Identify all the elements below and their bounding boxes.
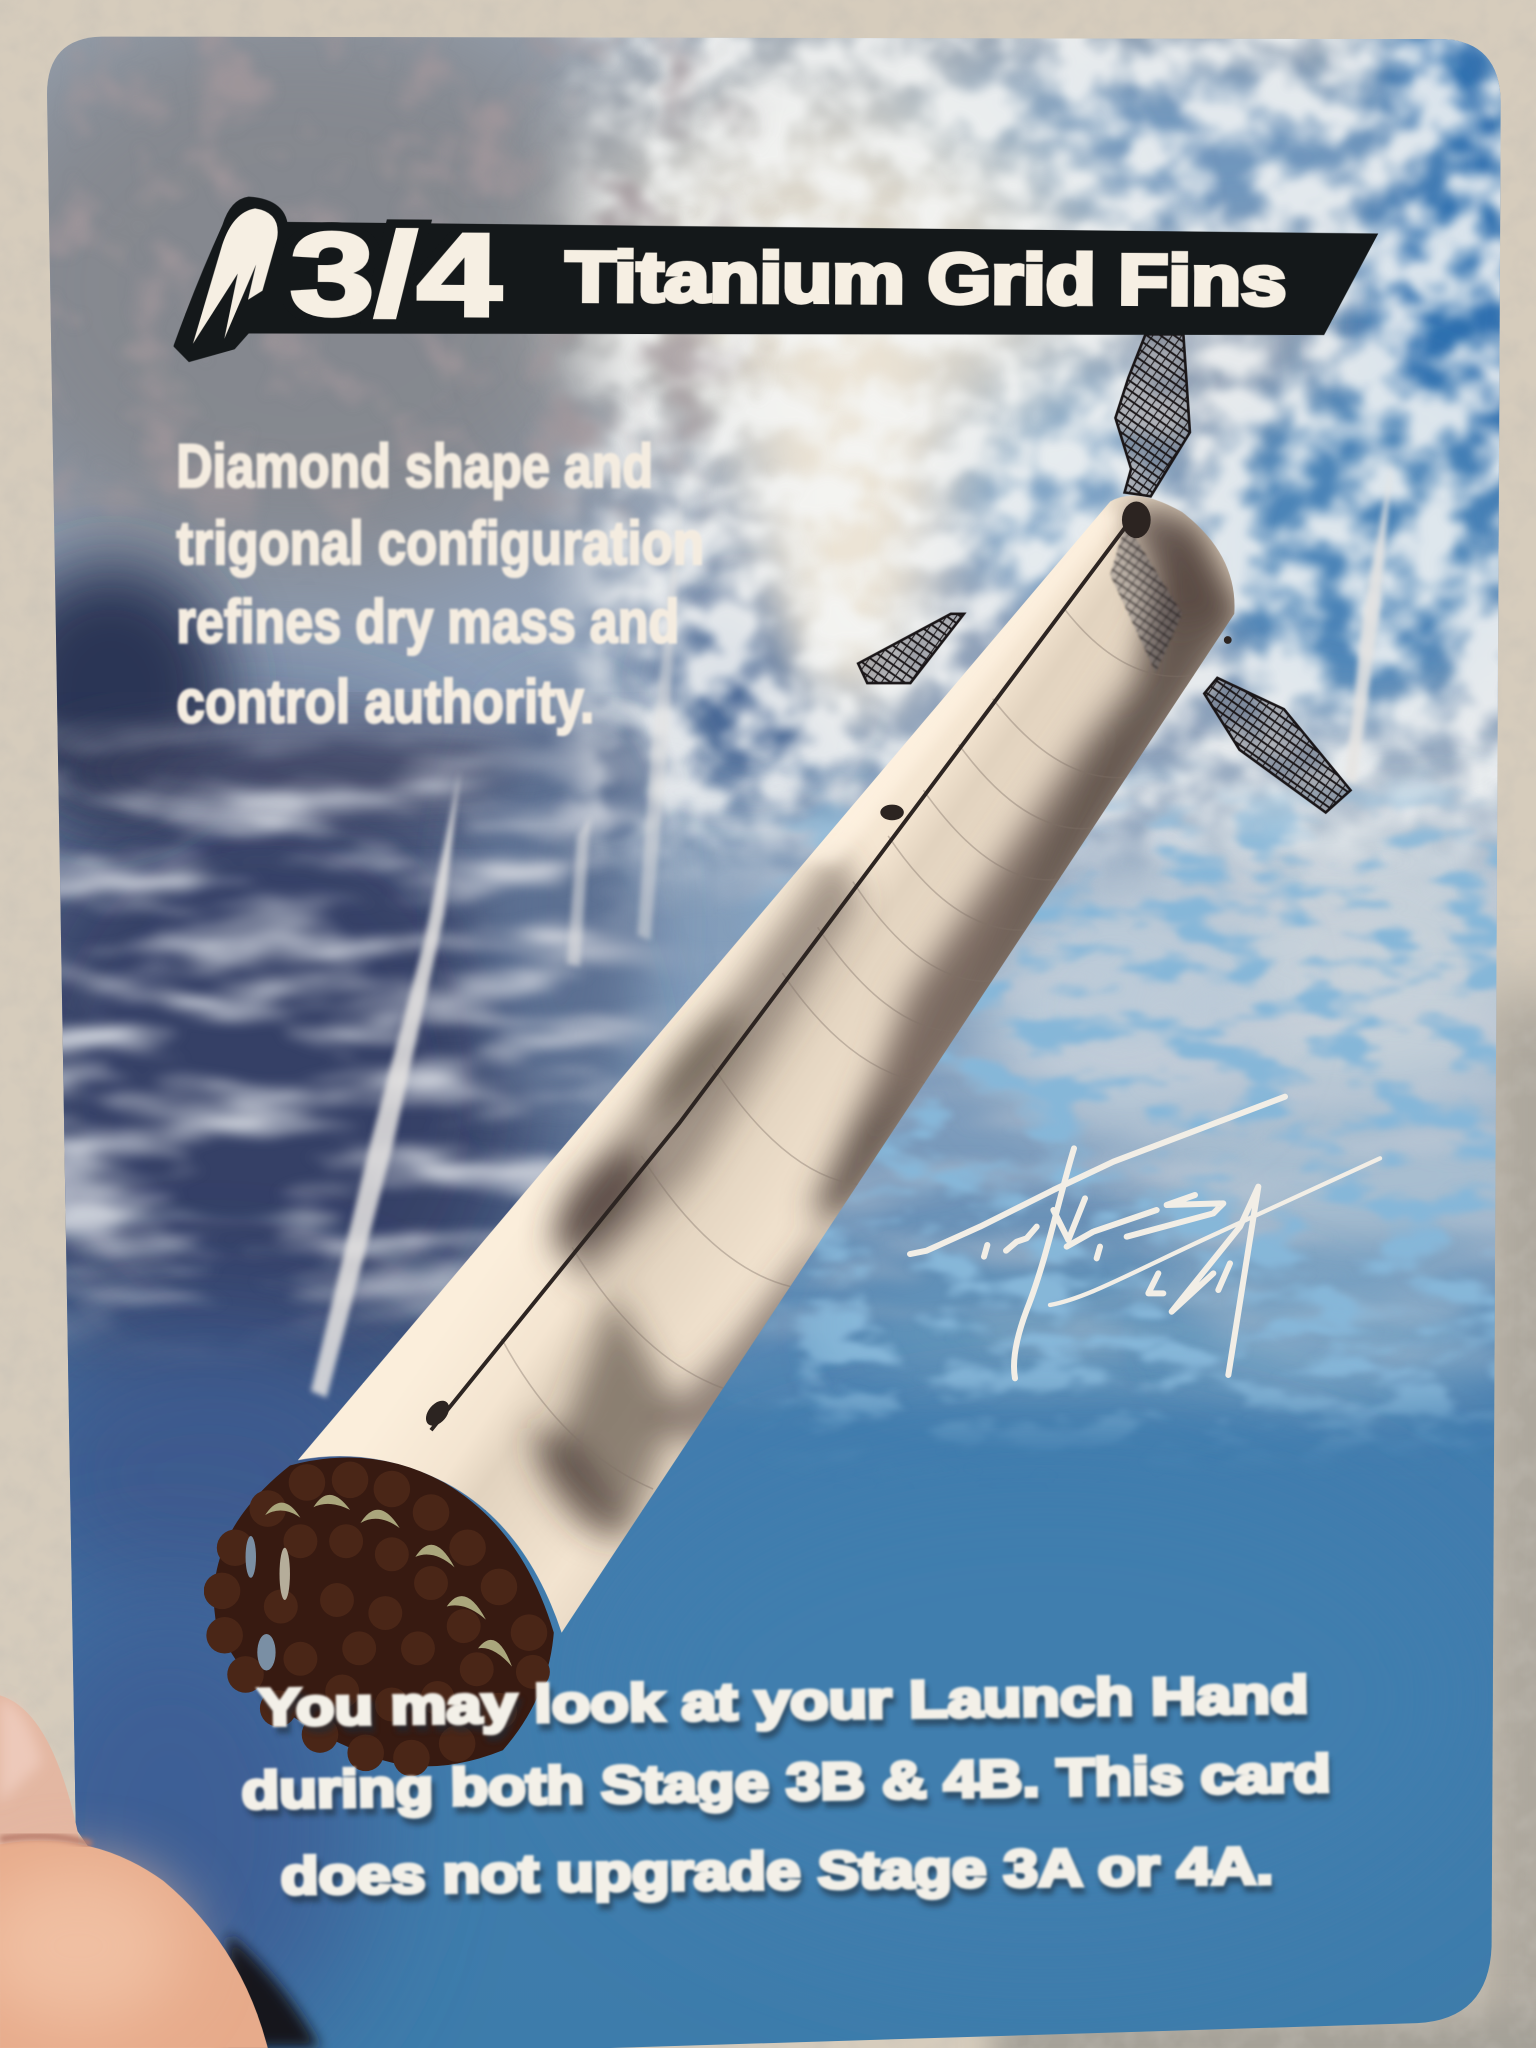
rules text shadow: You may look at your Launch Hand bbox=[262, 1673, 1310, 1744]
signature bbox=[910, 1097, 1380, 1378]
icon: top grid fin bbox=[1115, 334, 1190, 496]
rules text bbox=[241, 1666, 1333, 1912]
icon: right grid fin bbox=[1204, 678, 1351, 812]
flavor text bbox=[176, 432, 704, 736]
cloud texture layers bbox=[50, 37, 1500, 1446]
booster seam bbox=[431, 516, 1134, 1430]
card number: 3/4 bbox=[290, 208, 502, 341]
card number outline: 3/4 bbox=[290, 208, 502, 341]
card title: Titanium Grid Fins bbox=[565, 236, 1287, 320]
banner shape bbox=[189, 221, 1378, 341]
engine cluster bbox=[204, 1457, 554, 1776]
booster body bbox=[261, 470, 1280, 1646]
illustration: rocket booster bbox=[204, 334, 1351, 1776]
rules text shadow: during both Stage 3B & 4B. This card bbox=[245, 1752, 1333, 1827]
icon: rear grid fin bbox=[858, 614, 964, 683]
rules text lines: during both Stage 3B & 4B. This card bbox=[241, 1745, 1331, 1820]
raceway fittings bbox=[421, 502, 1232, 1430]
flavor text: refines dry mass and bbox=[176, 588, 679, 657]
rules text lines: does not upgrade Stage 3A or 4A. bbox=[280, 1838, 1274, 1906]
rules text shadow: does not upgrade Stage 3A or 4A. bbox=[284, 1844, 1275, 1912]
flavor text: control authority. bbox=[176, 667, 594, 736]
rules text shadow bbox=[245, 1673, 1333, 1912]
rules text lines: You may look at your Launch Hand bbox=[258, 1666, 1309, 1737]
banner: title bar bbox=[173, 196, 1378, 369]
flavor text: Diamond shape and bbox=[176, 432, 653, 501]
rules text lines bbox=[241, 1666, 1331, 1906]
hand: fingers bbox=[0, 1695, 320, 2048]
flavor text: trigonal configuration bbox=[176, 509, 704, 578]
icon: comet bbox=[173, 196, 288, 363]
contrails bbox=[311, 457, 1392, 1398]
